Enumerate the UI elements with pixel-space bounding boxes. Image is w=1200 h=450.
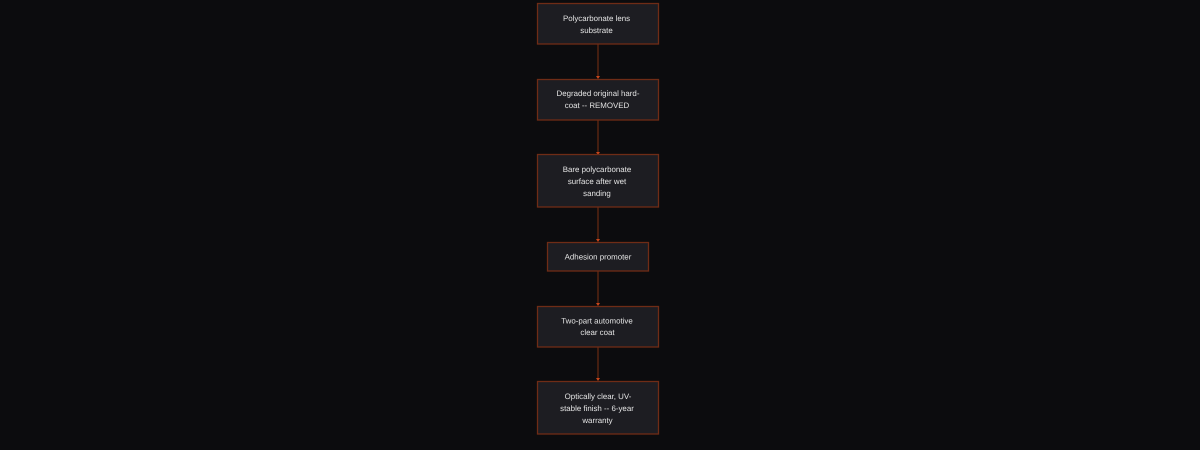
node: bare polycarbonate surface: sanding [583, 189, 611, 198]
node: bare polycarbonate surface [538, 154, 658, 207]
node: adhesion promoter [548, 242, 648, 271]
node: polycarbonate lens substrate [538, 4, 658, 44]
node: degraded original hard-coat: coat -- REMOVED [565, 101, 630, 110]
node: bare polycarbonate surface: surface after wet [568, 177, 627, 186]
arrow: adhesion promoter to clear coat [596, 271, 600, 306]
arrow: bare surface to adhesion promoter [596, 207, 600, 242]
node: degraded original hard-coat: Degraded original hard- [557, 89, 640, 98]
arrow: hard-coat to bare surface [596, 120, 600, 155]
arrow: substrate to hard-coat [596, 44, 600, 79]
node: two-part automotive clear coat: Two-part automotive [561, 316, 633, 326]
node: optically clear finish: Optically clear, UV- [565, 392, 632, 401]
node: optically clear finish: warranty [581, 416, 613, 425]
node: two-part automotive clear coat: clear coat [580, 328, 615, 337]
node: polycarbonate lens substrate: substrate [580, 26, 613, 35]
node: polycarbonate lens substrate: Polycarbonate lens [563, 14, 630, 23]
node: bare polycarbonate surface: Bare polycarbonate [563, 165, 632, 174]
node: adhesion promoter: Adhesion promoter [565, 252, 632, 262]
node: optically clear finish: stable finish -- 6-year [560, 404, 634, 413]
node: degraded original hard-coat [538, 80, 658, 120]
node: two-part automotive clear coat [538, 306, 658, 347]
node: optically clear finish [538, 382, 658, 434]
arrow: clear coat to finish [596, 347, 600, 381]
